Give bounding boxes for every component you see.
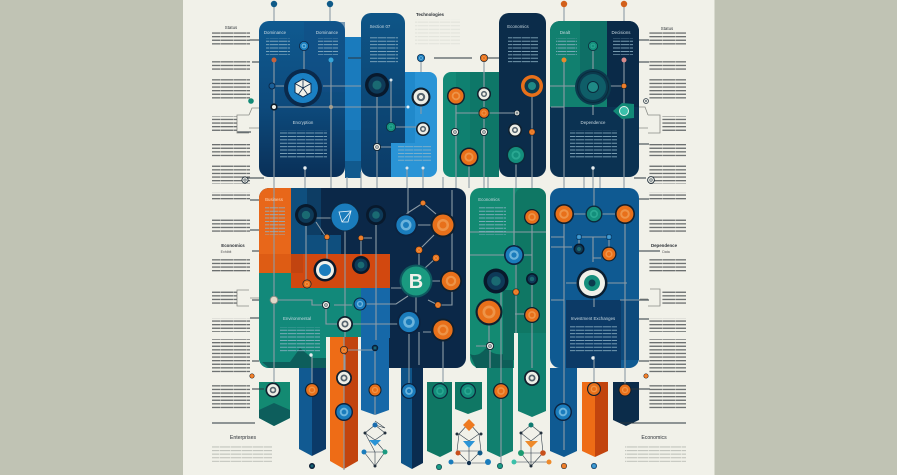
node — [480, 54, 488, 62]
node — [588, 41, 598, 51]
headings: Status — [661, 26, 674, 31]
node — [406, 106, 410, 108]
headings: Economics — [507, 24, 530, 29]
node — [506, 146, 526, 164]
node — [270, 296, 278, 304]
node — [432, 383, 448, 399]
node — [420, 200, 426, 206]
node — [587, 382, 601, 396]
node — [299, 41, 309, 51]
node — [451, 128, 459, 136]
node — [618, 384, 632, 396]
node — [602, 246, 616, 262]
node — [269, 83, 275, 89]
panel: blue section — [361, 288, 390, 338]
node — [524, 307, 540, 323]
node — [476, 298, 502, 326]
node — [477, 87, 491, 101]
headings: Dominance — [264, 30, 287, 35]
right text blocks — [649, 31, 686, 409]
node — [417, 54, 425, 62]
node — [432, 254, 440, 262]
panel: central navy block — [259, 188, 466, 368]
node — [397, 310, 421, 334]
headings: Dependence — [651, 243, 678, 248]
node — [440, 270, 462, 292]
panel: blue connector strip — [345, 37, 361, 178]
headings: Enterprises — [230, 435, 257, 441]
node — [366, 205, 386, 225]
headings: Dependence — [581, 120, 606, 125]
node — [576, 234, 582, 240]
node — [528, 128, 536, 136]
column: blue middle — [361, 337, 389, 415]
node — [647, 176, 655, 184]
shield: green column — [427, 382, 452, 457]
column: orange right — [582, 382, 608, 457]
node — [394, 214, 418, 236]
headings: Technologies — [416, 12, 445, 17]
network diagram: left — [362, 421, 388, 468]
icon: teal diamond — [613, 103, 634, 119]
node — [486, 342, 494, 350]
node — [622, 58, 626, 62]
node: top pin markers — [271, 1, 627, 7]
side callout box lower left — [237, 290, 259, 306]
node — [554, 204, 574, 224]
node — [354, 298, 366, 310]
column: green short — [518, 333, 546, 417]
top centre faint text — [415, 19, 460, 46]
side callout box lower right — [640, 289, 660, 306]
shield: navy — [613, 382, 639, 426]
headings: Environmental — [283, 316, 311, 321]
node — [368, 384, 382, 396]
column: blue right — [550, 368, 577, 457]
node — [242, 176, 248, 184]
node — [521, 75, 543, 97]
node — [484, 268, 508, 294]
node — [271, 104, 277, 110]
panel: top left blue card — [259, 21, 345, 177]
node — [373, 143, 381, 151]
right footer text — [625, 445, 686, 462]
node — [514, 110, 520, 116]
icon: blue network — [331, 203, 359, 231]
node — [430, 212, 456, 238]
panel: right green card — [470, 188, 546, 368]
network diagram: right — [512, 422, 552, 468]
node — [497, 463, 503, 469]
column: blue left — [299, 368, 326, 456]
node — [352, 256, 370, 274]
node — [272, 58, 276, 62]
node — [574, 244, 584, 254]
node — [386, 122, 396, 132]
panel: green section — [259, 273, 361, 368]
node — [365, 73, 389, 97]
shield: short green — [455, 382, 482, 414]
node — [621, 83, 627, 89]
node — [309, 353, 313, 357]
icon: bitcoin hub: B — [409, 271, 423, 293]
headings: Economics — [221, 243, 245, 248]
headings: Exhibit — [221, 250, 231, 254]
column: green — [487, 368, 513, 457]
white cutouts between blocks — [326, 337, 590, 381]
node — [586, 206, 602, 222]
node — [561, 463, 567, 469]
node — [460, 383, 476, 399]
node — [643, 98, 649, 104]
node — [340, 346, 348, 354]
node — [303, 166, 307, 170]
node — [329, 105, 333, 109]
node — [248, 98, 254, 104]
left text blocks — [212, 31, 250, 409]
node — [336, 370, 352, 386]
node — [512, 288, 520, 296]
node — [305, 383, 319, 397]
shield: left green — [259, 382, 290, 426]
panel: tall navy card — [499, 13, 546, 177]
panel: tall blue card — [361, 13, 405, 177]
node — [302, 280, 312, 288]
page sheet — [183, 0, 714, 475]
node — [434, 302, 442, 308]
headings: Dominance — [316, 30, 339, 35]
node — [644, 374, 648, 378]
column: navy and blue — [401, 368, 423, 469]
headings: Decisions — [611, 30, 631, 35]
panel: right blue card — [550, 188, 639, 368]
headings: Section 07 — [370, 24, 391, 29]
node — [478, 108, 490, 118]
connector lines on paper — [212, 40, 686, 423]
node — [554, 403, 572, 421]
node — [524, 209, 540, 225]
node — [401, 383, 417, 399]
headings — [221, 12, 678, 441]
side callout box left — [237, 108, 259, 133]
node — [460, 148, 478, 166]
side callout box right — [639, 107, 660, 133]
node — [422, 166, 424, 170]
node — [415, 246, 423, 254]
node — [328, 58, 334, 62]
node — [508, 123, 522, 137]
card body text — [265, 37, 633, 352]
node — [524, 370, 540, 386]
node — [416, 122, 430, 136]
node — [337, 316, 353, 332]
node — [615, 204, 635, 224]
node — [436, 464, 442, 470]
node — [432, 318, 454, 342]
node — [493, 383, 509, 399]
node — [447, 87, 465, 105]
node — [309, 463, 315, 469]
node — [335, 403, 353, 421]
node — [322, 301, 330, 309]
column: orange — [330, 337, 358, 469]
headings: Encryption — [293, 120, 314, 125]
headings: Economics — [641, 435, 667, 441]
icon: concentric hub — [575, 69, 611, 105]
headings: Data — [662, 250, 670, 254]
node — [372, 345, 378, 351]
node — [591, 166, 595, 170]
panel: orange section — [259, 188, 390, 288]
icon: hexagon cube hub — [284, 69, 322, 107]
network diagram: centre — [448, 419, 491, 466]
headings: Dealt — [560, 30, 571, 35]
node — [266, 382, 280, 398]
node — [250, 374, 254, 378]
node — [591, 463, 597, 469]
node — [480, 128, 488, 136]
node — [562, 58, 566, 62]
headings: Business — [265, 197, 284, 202]
node — [324, 234, 330, 240]
panel: top green card — [443, 72, 499, 177]
node — [606, 234, 612, 240]
panel: light blue card — [391, 72, 437, 177]
node — [406, 166, 408, 170]
headings: Economics — [478, 197, 501, 202]
node — [295, 204, 317, 226]
node — [314, 258, 336, 282]
node — [591, 356, 595, 360]
headings: Status — [225, 25, 238, 30]
connector lines — [272, 7, 640, 470]
icon: bitcoin hub — [400, 264, 432, 298]
node — [526, 273, 538, 285]
node — [358, 235, 364, 241]
icon: white and teal hub — [576, 268, 608, 298]
panel: top right green and navy card — [550, 21, 639, 177]
node — [504, 245, 524, 265]
node — [390, 78, 392, 82]
node — [412, 88, 430, 106]
left footer text — [212, 445, 272, 462]
headings: Investment Exchanges — [571, 316, 616, 321]
